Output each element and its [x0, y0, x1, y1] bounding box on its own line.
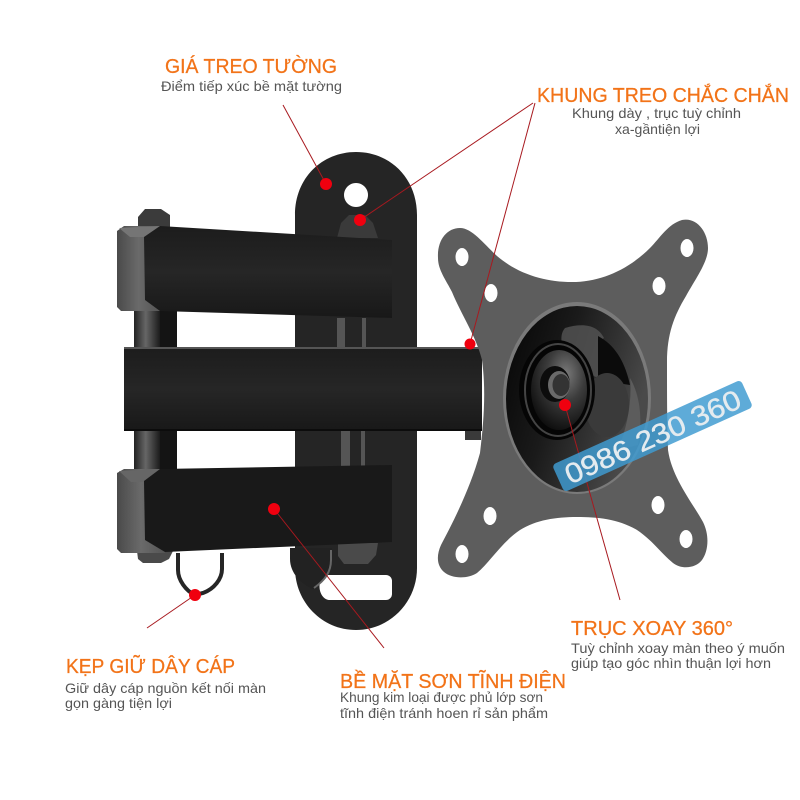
- callout: sturdy frame: xa-gầntiện lợi: [615, 121, 700, 137]
- lower arm: [117, 465, 392, 553]
- callout: sturdy frame: Khung dày , trục tuỳ chỉnh: [572, 105, 741, 121]
- callout: 360 swivel: TRỤC XOAY 360°: [571, 618, 733, 640]
- callout: cable clip: KẸP GIỮ DÂY CÁP: [66, 654, 235, 678]
- callout: 360 swivel: giúp tạo góc nhìn thuận lợi hơn: [571, 655, 771, 671]
- callout: 360 swivel: [571, 618, 785, 671]
- callout: cable clip: [65, 654, 266, 711]
- swivel dish: [503, 302, 651, 494]
- callout: powder coating: BỀ MẶT SƠN TĨNH ĐIỆN: [340, 669, 566, 693]
- callout: cable clip: Giữ dây cáp nguồn kết nối màn: [65, 680, 266, 696]
- leader lines: [147, 103, 620, 648]
- cable clips: [137, 543, 378, 595]
- callout: sturdy frame: [537, 83, 789, 137]
- upper arm: [117, 226, 392, 318]
- callout: wall mount: [161, 55, 342, 94]
- red marker dots: [189, 178, 571, 601]
- phone number badge: 0986 230 360: [560, 384, 746, 490]
- VESA mounting plate: [438, 220, 708, 577]
- callout: sturdy frame: KHUNG TREO CHẮC CHẮN: [537, 83, 789, 107]
- callout: 360 swivel: Tuỳ chỉnh xoay màn theo ý muốn: [571, 640, 785, 656]
- middle arm: [124, 347, 482, 440]
- callout: powder coating: tĩnh điện tránh hoen rỉ sản phẩm: [340, 705, 548, 721]
- rear hinge posts: [134, 310, 177, 471]
- callout: powder coating: [340, 669, 566, 721]
- callout: cable clip: gọn gàng tiện lợi: [65, 695, 172, 711]
- top bolt: [138, 209, 170, 227]
- callout: powder coating: Khung kim loại được phủ lớp sơn: [340, 689, 543, 705]
- callout: wall mount: GIÁ TREO TƯỜNG: [165, 55, 337, 78]
- callout: wall mount: Điểm tiếp xúc bề mặt tường: [161, 78, 342, 94]
- wall plate: [295, 152, 417, 630]
